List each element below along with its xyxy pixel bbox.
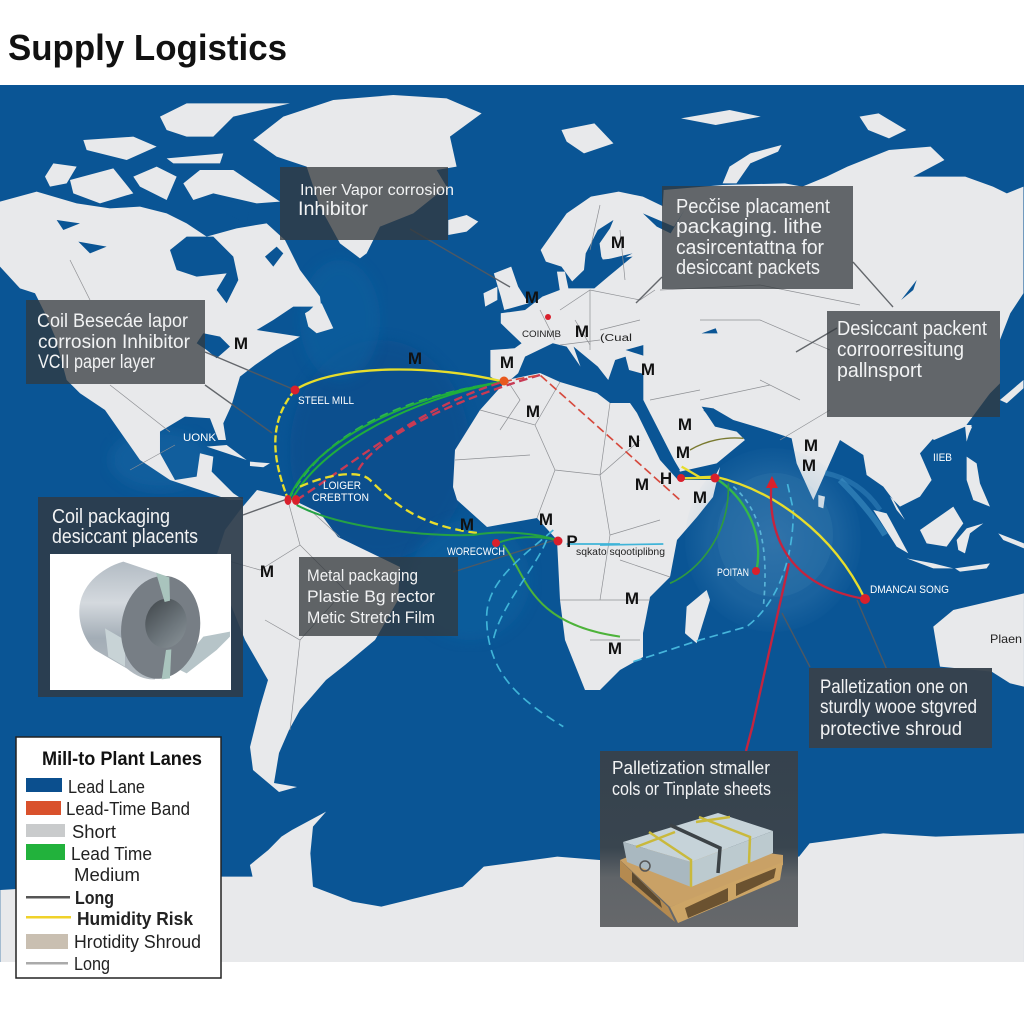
- dashed yellow route to gulf of guinea: [300, 474, 480, 533]
- panel: coil packaging with coil image: [38, 497, 243, 697]
- panel: precise placement: packaging. lithe: [676, 216, 822, 238]
- panel: coil reserve vapor corrosion inhibitor: Coil Besecáe lapor: [37, 311, 189, 332]
- panel: inner vapor corrosion inhibitor: [280, 167, 454, 240]
- legend: long bold: [26, 888, 114, 908]
- panel: precise placement: Pecčise placament: [676, 196, 830, 218]
- panel: coil packaging with coil image: desiccant placents: [52, 526, 198, 548]
- south america: [215, 490, 400, 792]
- panel: desiccant packet: Desiccant packent: [837, 318, 987, 340]
- map markers M: M: [625, 589, 639, 608]
- legend: short: Short: [72, 822, 116, 842]
- red route lower leg: [746, 728, 752, 751]
- panel: palletization tinplate sheets: [600, 751, 798, 927]
- map place labels: IIEB: [933, 452, 952, 464]
- indian ocean glow: [685, 448, 885, 632]
- dashed yellow route: [275, 390, 295, 500]
- route nodes: [284, 314, 870, 604]
- map place labels: STEEL MILL: [298, 395, 354, 407]
- panel: precise placement: casircentattna for: [676, 237, 824, 259]
- connector lines: [205, 229, 893, 670]
- legend: lead lane: Lead Lane: [68, 777, 145, 797]
- map place labels: WORECWCH: [447, 546, 505, 558]
- map place labels: Plaen: [990, 632, 1022, 646]
- supply routes: [275, 369, 680, 727]
- eurasia: [483, 110, 1023, 440]
- map markers M: [234, 233, 818, 658]
- middle east seas: [642, 407, 745, 473]
- map place labels: (Cual: [600, 333, 632, 344]
- map markers M: M: [635, 475, 649, 494]
- panel: precise placement: [662, 186, 853, 289]
- map place labels: DMANCAI SONG: [870, 584, 949, 596]
- map markers M: M: [678, 415, 692, 434]
- panel: coil reserve vapor corrosion inhibitor: [26, 300, 205, 384]
- panel: metal packaging: Metic Stretch Film: [307, 608, 435, 627]
- map markers M: M: [608, 639, 622, 658]
- panel: palletization on wood with shroud: Palletization one on: [820, 677, 968, 698]
- map markers M: M: [260, 562, 274, 581]
- panel: desiccant packet: [827, 311, 1000, 417]
- panel: desiccant packet: corroorresitung: [837, 339, 964, 361]
- panel: palletization on wood with shroud: [809, 668, 992, 748]
- legend: lead lane: [26, 777, 145, 797]
- north america and greenland: [0, 95, 482, 500]
- panel: palletization tinplate sheets: Palletization stmaller: [612, 758, 770, 778]
- legend: long: Long: [74, 954, 110, 974]
- map markers M: P: [566, 532, 578, 551]
- panel: desiccant packet: pallnsport: [837, 360, 922, 382]
- map place labels: LOIGER: [323, 480, 361, 492]
- country borders: [70, 205, 860, 730]
- legend: lead time: [26, 844, 152, 864]
- map markers M: M: [408, 349, 422, 368]
- panel: metal packaging: Metal packaging: [307, 566, 418, 585]
- legend: humidity risk: Humidity Risk: [77, 909, 194, 929]
- map place labels: sqkato sqootiplibng: [576, 547, 665, 558]
- map markers M: M: [802, 456, 816, 475]
- map markers M: M: [500, 353, 514, 372]
- map markers M: M: [460, 515, 474, 534]
- legend: medium: Medium: [74, 865, 140, 885]
- map markers M: M: [641, 360, 655, 379]
- panel: inner vapor corrosion inhibitor: Inhibitor: [298, 199, 369, 220]
- panel: coil reserve vapor corrosion inhibitor: corrosion Inhibitor: [38, 332, 191, 353]
- red route: [771, 480, 865, 599]
- map place labels: [183, 329, 1022, 646]
- icon: steel coil: [79, 562, 230, 684]
- map markers M: M: [526, 402, 540, 421]
- map place labels: COINMB: [522, 329, 561, 339]
- map markers M: M: [525, 288, 539, 307]
- antarctica: [0, 812, 1024, 962]
- map markers M: N: [628, 432, 640, 451]
- cyan dashed indian ocean route: [633, 480, 793, 662]
- legend: short: [26, 822, 116, 842]
- green routes to iberia: [288, 382, 503, 500]
- panel: coil packaging with coil image: Coil packaging: [52, 506, 170, 528]
- dashed red route to red sea: [503, 375, 680, 500]
- map markers M: M: [611, 233, 625, 252]
- panel: precise placement: desiccant packets: [676, 257, 820, 279]
- south asia and southeast asia: [643, 333, 1024, 687]
- map place labels: POITAN: [717, 567, 749, 579]
- panel: palletization on wood with shroud: protective shroud: [820, 719, 962, 740]
- map markers M: H: [660, 469, 672, 488]
- legend: long: [26, 954, 110, 974]
- title: Supply Logistics: [8, 27, 287, 68]
- map markers M: M: [575, 322, 589, 341]
- panel: metal packaging: Plastie Bg rector: [307, 587, 435, 606]
- cyan label line: [600, 541, 663, 547]
- green route to west africa: [297, 505, 557, 543]
- yellow atlantic route: [295, 369, 503, 390]
- north american inland seas: [57, 197, 283, 447]
- panel: inner vapor corrosion inhibitor: Inner Vapor corrosion: [300, 182, 454, 199]
- legend: Mill-to Plant Lanes: [42, 749, 202, 770]
- legend: humidity shroud: Hrotidity Shroud: [74, 932, 201, 952]
- solid green route: [288, 382, 503, 500]
- map markers M: M: [804, 436, 818, 455]
- map markers M: M: [234, 334, 248, 353]
- panel: palletization on wood with shroud: sturdly wooe stgvred: [820, 697, 977, 718]
- panel: metal packaging: [299, 557, 458, 636]
- green route to east africa: [670, 483, 728, 583]
- cyan dashed routes: [487, 530, 563, 727]
- map markers M: M: [693, 488, 707, 507]
- red dashed routes: [297, 375, 540, 500]
- blue dashed route: [733, 487, 765, 607]
- panel: palletization tinplate sheets: cols or Tinplate sheets: [612, 779, 771, 799]
- map place labels: CREBTTON: [312, 492, 369, 504]
- eurasian inland seas: [570, 210, 917, 373]
- olive route: [690, 438, 743, 450]
- icon: wooden pallet with wrapped sheets: [620, 813, 783, 923]
- legend: long bold: Long: [75, 888, 114, 908]
- yellow route east: [715, 477, 865, 599]
- legend: lead-time band: Lead-Time Band: [66, 799, 190, 819]
- green route to southern africa: [503, 545, 620, 637]
- africa: [453, 373, 720, 690]
- panel: coil reserve vapor corrosion inhibitor: VCII paper layer: [38, 352, 156, 373]
- map markers M: M: [676, 443, 690, 462]
- map place labels: UONK: [183, 432, 217, 444]
- cyan line to label: [567, 541, 620, 546]
- red route to pallet: [752, 563, 789, 730]
- map markers M: M: [539, 510, 553, 529]
- legend: lead time: Lead Time: [71, 844, 152, 864]
- green route to port: [718, 480, 758, 570]
- yellow route gulf: [682, 467, 715, 478]
- legend: [16, 737, 221, 978]
